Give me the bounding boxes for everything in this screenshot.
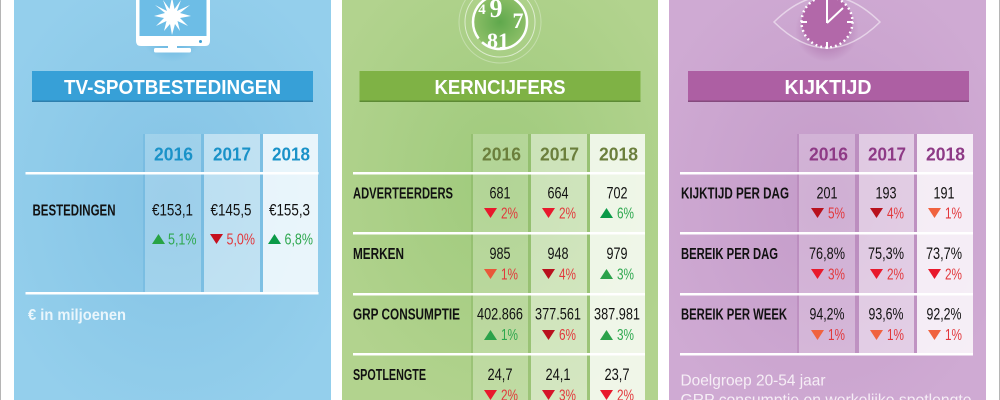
row: spotlengte: 23,7 — [604, 366, 630, 384]
row: bestedingen: €145,5 — [210, 202, 252, 220]
heading banner: kerncijfers: KERNCIJFERS — [434, 77, 566, 99]
row: bereik per dag: BEREIK PER DAG — [681, 246, 778, 263]
row: kijktijd per dag: 201 — [816, 184, 838, 202]
row: merken: MERKEN — [353, 246, 404, 263]
footnote — [680, 372, 972, 400]
year headers: 2017 — [213, 144, 251, 164]
row: bereik per week: 1% — [945, 327, 962, 344]
row: bereik per dag: 3% — [828, 266, 845, 284]
year headers: 2018 — [272, 144, 310, 164]
row: bestedingen: 5,1% — [168, 232, 196, 248]
year headers: 2017 — [540, 144, 579, 164]
row: bestedingen: €153,1 — [152, 202, 193, 220]
heading banner: TV-spotbestedingen: TV-SPOTBESTEDINGEN — [64, 77, 281, 99]
row: bereik per week: 1% — [887, 327, 904, 344]
year columns — [143, 134, 318, 292]
icon: numbers in a circle — [459, 0, 541, 63]
row: bereik per dag: 2% — [887, 266, 904, 284]
row: bereik per week — [681, 306, 962, 344]
row: adverteerders — [353, 184, 634, 222]
row: spotlengte — [353, 366, 634, 400]
row: bereik per dag: 73,7% — [926, 245, 962, 263]
row: spotlengte: 24,7 — [488, 366, 512, 384]
year headers: 2016 — [809, 144, 848, 164]
year headers — [154, 144, 310, 164]
row: bestedingen — [32, 202, 313, 248]
heading banner: kijktijd — [688, 71, 969, 102]
row: GRP consumptie: 387.981 — [594, 306, 640, 324]
year columns — [471, 134, 645, 400]
year headers: 2018 — [926, 144, 965, 164]
icon: eye with clock — [774, 0, 880, 62]
row: adverteerders: 702 — [606, 184, 628, 202]
row: adverteerders: 681 — [490, 184, 510, 202]
year headers: 2017 — [868, 144, 906, 164]
row: GRP consumptie: 6% — [559, 327, 576, 344]
footnote: Doelgroep 20-54 jaar — [680, 372, 826, 390]
row: adverteerders: 2% — [559, 206, 576, 222]
row: adverteerders: ADVERTEERDERS — [353, 186, 453, 202]
row: GRP consumptie: 377.561 — [535, 306, 581, 324]
row: kijktijd per dag — [681, 184, 962, 222]
row: bereik per week: 93,6% — [868, 306, 904, 324]
row: bestedingen: 6,8% — [284, 232, 313, 248]
row: bestedingen: 5,0% — [226, 232, 255, 248]
row: kijktijd per dag: 5% — [828, 206, 845, 222]
row: adverteerders: 664 — [548, 184, 568, 202]
row: bereik per week: 94,2% — [810, 306, 845, 324]
row: adverteerders: 2% — [501, 206, 518, 222]
row: bereik per week: BEREIK PER WEEK — [681, 306, 787, 324]
icon: numbers in a circle: 4 — [478, 2, 486, 18]
panel: TV-spotbestedingen — [14, 0, 331, 400]
year headers: 2016 — [482, 144, 521, 164]
panel: kerncijfers — [342, 0, 658, 400]
row: merken: 1% — [501, 266, 518, 284]
year headers — [809, 144, 965, 164]
row: bereik per week: 1% — [828, 327, 845, 344]
year headers — [482, 144, 638, 164]
heading banner: kerncijfers — [360, 71, 640, 102]
row: kijktijd per dag: 4% — [887, 206, 904, 222]
year columns — [797, 134, 973, 353]
table rules — [26, 172, 318, 294]
table rules — [680, 172, 973, 356]
row: GRP consumptie — [353, 306, 640, 344]
row: adverteerders: 6% — [617, 206, 634, 222]
icon: television with burst — [136, 0, 210, 62]
row: merken: 948 — [548, 245, 568, 263]
row: GRP consumptie: 402.866 — [477, 306, 523, 324]
row: merken — [353, 245, 634, 284]
table rules — [353, 172, 645, 356]
row: bestedingen: BESTEDINGEN — [32, 202, 116, 220]
icon: numbers in a circle: 81 — [487, 28, 509, 53]
row: merken: 3% — [617, 266, 634, 284]
panel: kijktijd — [669, 0, 986, 400]
row: merken: 985 — [490, 245, 510, 263]
row: bereik per dag: 76,8% — [809, 245, 845, 263]
row: merken: 4% — [559, 266, 576, 284]
row: kijktijd per dag: KIJKTIJD PER DAG — [681, 186, 789, 202]
row: GRP consumptie: GRP CONSUMPTIE — [353, 306, 460, 324]
heading banner: TV-spotbestedingen — [32, 71, 313, 102]
icon: numbers in a circle: 7 — [512, 8, 524, 33]
row: spotlengte: SPOTLENGTE — [353, 367, 426, 384]
row: merken: 979 — [606, 245, 628, 263]
year headers: 2016 — [154, 144, 193, 164]
heading banner: kijktijd: KIJKTIJD — [784, 77, 872, 99]
row: bereik per dag — [681, 245, 962, 284]
row: kijktijd per dag: 1% — [945, 206, 962, 222]
row: kijktijd per dag: 191 — [934, 184, 954, 202]
row: GRP consumptie: 3% — [617, 327, 634, 344]
row: bereik per dag: 75,3% — [868, 245, 904, 263]
row: GRP consumptie: 1% — [501, 327, 518, 344]
row: bestedingen: €155,3 — [269, 202, 310, 220]
year headers: 2018 — [599, 144, 638, 164]
row: bereik per week: 92,2% — [926, 306, 962, 324]
row: spotlengte: 24,1 — [546, 366, 570, 384]
note: euro in miljoenen: € in miljoenen — [28, 307, 126, 324]
row: kijktijd per dag: 193 — [876, 184, 896, 202]
row: bereik per dag: 2% — [945, 266, 962, 284]
